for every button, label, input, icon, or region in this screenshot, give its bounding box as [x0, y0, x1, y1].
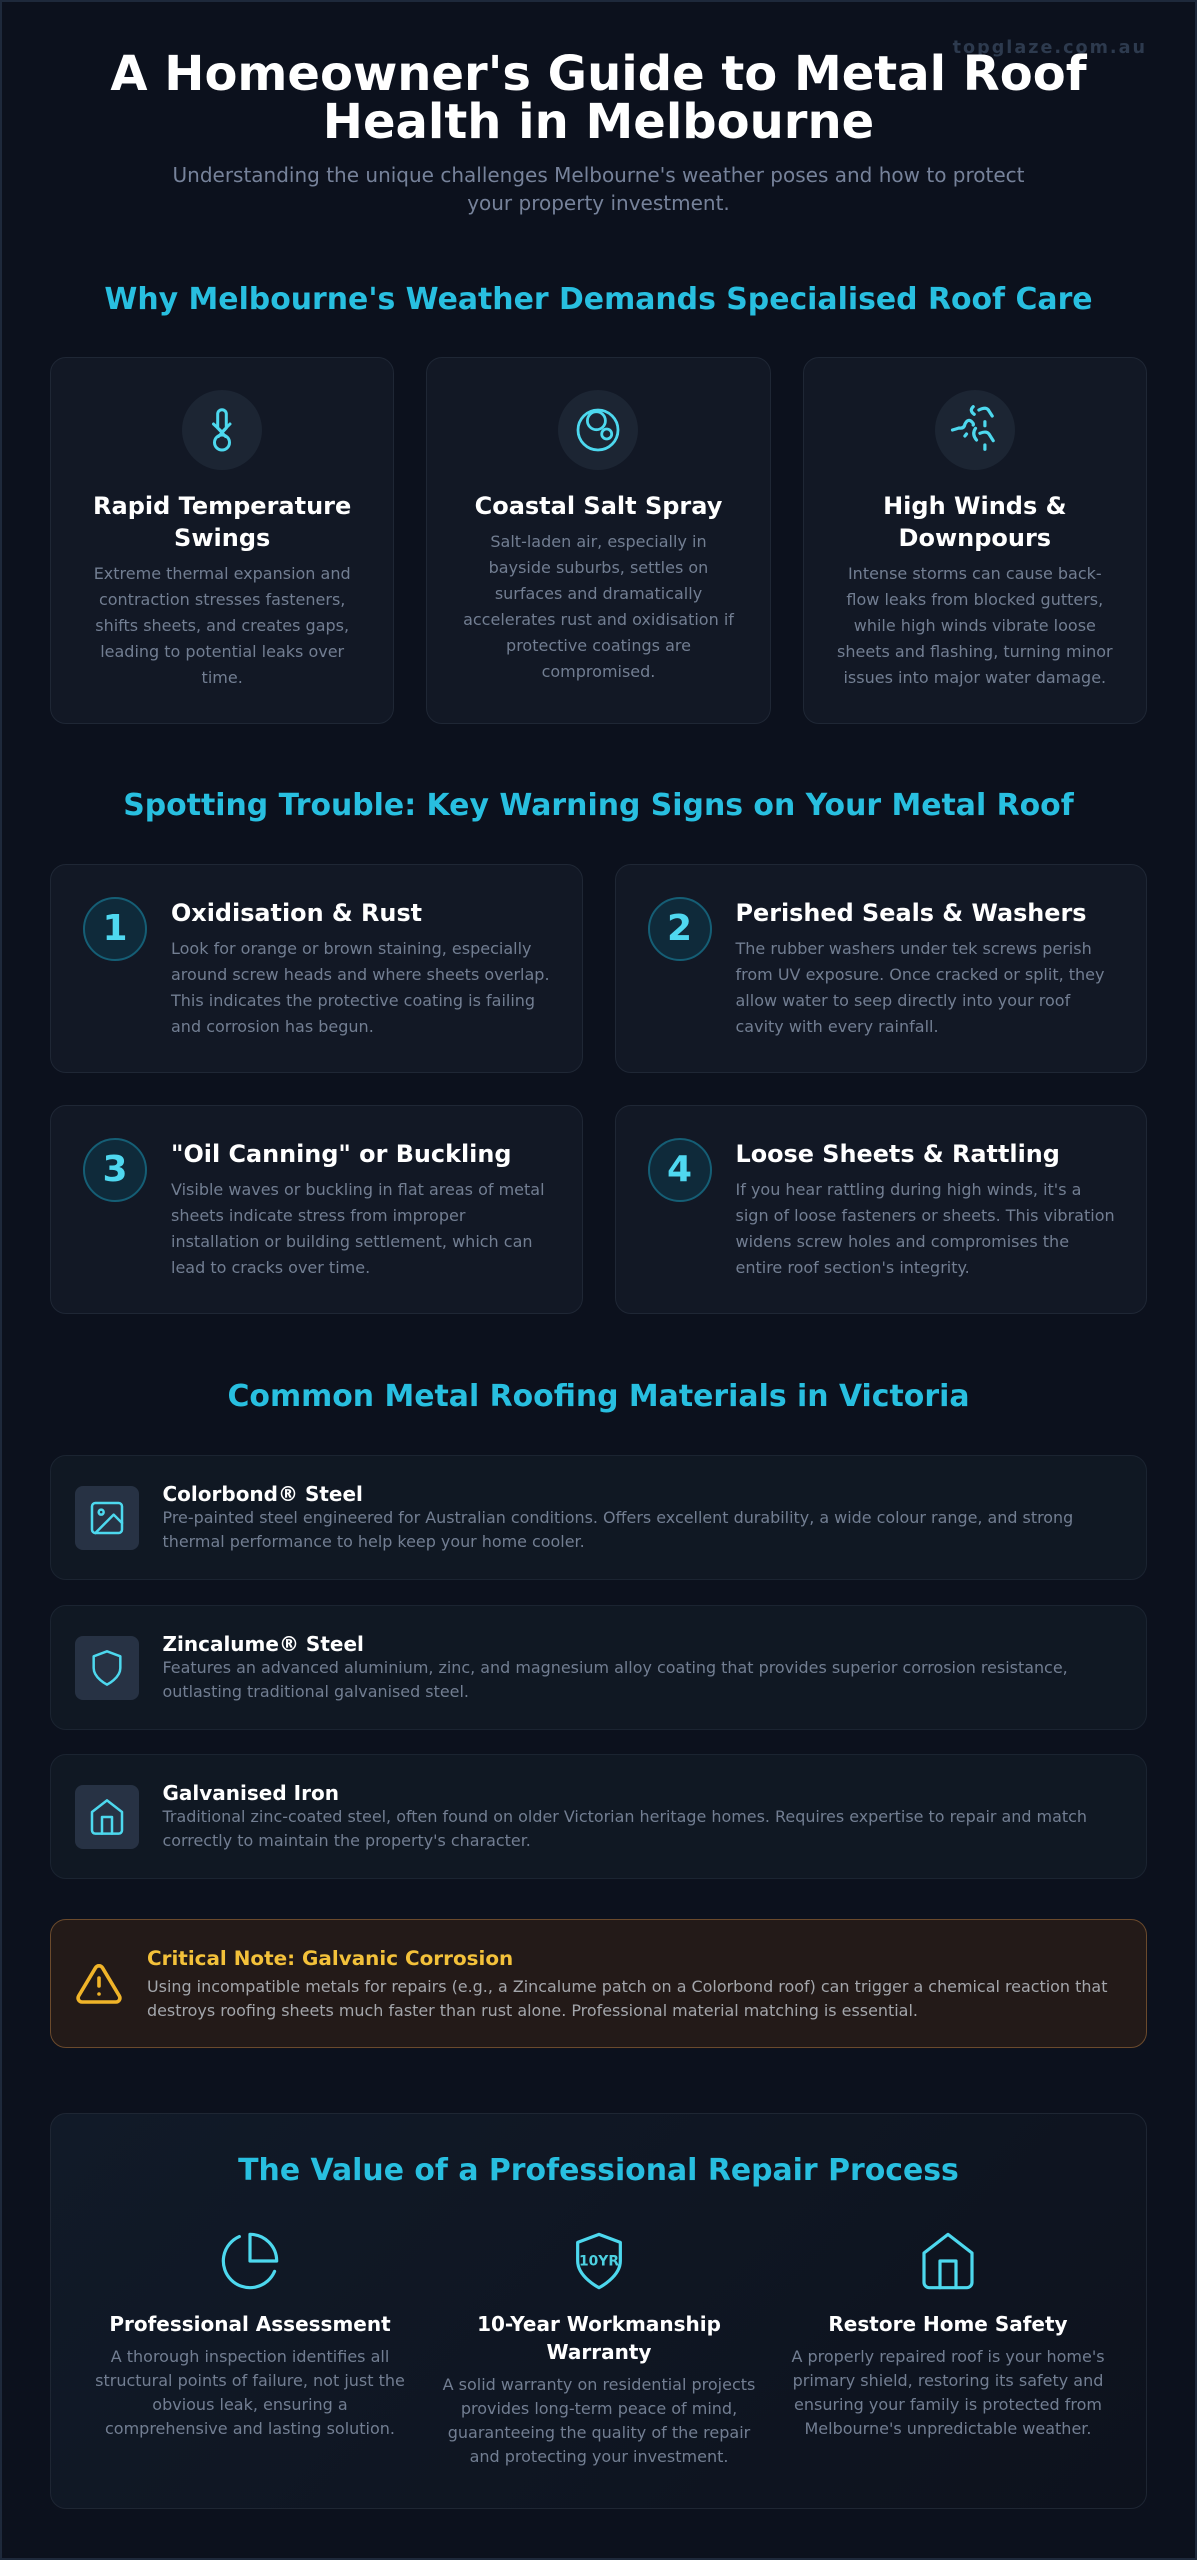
sign text: lead to cracks over time. [171, 1258, 370, 1276]
material text: Colorbond® Steel [162, 1482, 363, 1506]
column text: structural points of failure, not just the [95, 2371, 405, 2390]
card text: Intense storms can cause back- [848, 564, 1102, 583]
card text: Extreme thermal expansion and [94, 564, 351, 583]
material text: correctly to maintain the property's character. [162, 1831, 531, 1850]
panel: loose sheets [614, 1105, 1147, 1314]
icon: warranty shield: 10YR [579, 2253, 619, 2269]
material text: thermal performance to help keep your home cooler. [162, 1532, 585, 1551]
card text: bayside suburbs, settles on [489, 558, 708, 577]
card text: accelerates rust and oxidisation if [463, 610, 734, 629]
subtitle: Understanding the unique challenges Melbourne's weather poses and how to protect [172, 163, 1024, 187]
heading: value section: The Value of a Professional Repair Process [238, 2152, 959, 2188]
subtitle: your property investment. [467, 191, 730, 215]
number badge 2 [648, 897, 712, 961]
card title: High Winds & [883, 492, 1067, 520]
card text: sheets and flashing, turning minor [837, 642, 1113, 661]
heading: materials section: Common Metal Roofing Materials in Victoria [228, 1379, 970, 1414]
sign text: Perished Seals & Washers [736, 899, 1086, 927]
callout: galvanic corrosion [50, 1919, 1147, 2048]
title [110, 46, 1088, 150]
column text: A properly repaired roof is your home's [791, 2347, 1105, 2366]
column text: 10-Year Workmanship [477, 2312, 721, 2336]
card text: flow leaks from blocked gutters, [846, 590, 1103, 609]
card text: time. [202, 668, 243, 687]
card text [94, 564, 351, 687]
sign text: installation or building settlement, which can [171, 1232, 533, 1250]
column text: A solid warranty on residential projects [443, 2375, 755, 2394]
panel: oxidisation and rust [50, 864, 582, 1073]
card text: shifts sheets, and creates gaps, [95, 616, 349, 635]
panel: rapid temperature swings [50, 357, 394, 724]
column text: Restore Home Safety [828, 2312, 1068, 2336]
sign text: widens screw holes and compromises the [736, 1232, 1069, 1250]
sign text: If you hear rattling during high winds, it's a [736, 1180, 1081, 1198]
sign text: allow water to seep directly into your roof [736, 990, 1070, 1010]
callout text: Using incompatible metals for repairs (e.g., a Zincalume patch on a Colorbond roof) can trigger a chemical reaction that [147, 1977, 1107, 1996]
column text: Warranty [547, 2340, 651, 2364]
icon: thermometer [182, 390, 262, 470]
sign text: sheets indicate stress from improper [171, 1206, 465, 1224]
panel: perished seals [614, 864, 1147, 1073]
sign text: and corrosion has begun. [171, 1016, 374, 1036]
sign text: sign of loose fasteners or sheets. This vibration [736, 1206, 1115, 1224]
card text: while high winds vibrate loose [854, 616, 1096, 635]
sign text: entire roof section's integrity. [736, 1258, 970, 1276]
number badge 1 [83, 897, 147, 961]
material text: Traditional zinc-coated steel, often found on older Victorian heritage homes. Requires expertise to repair and match [162, 1807, 1087, 1826]
column text: Melbourne's unpredictable weather. [804, 2419, 1091, 2438]
sign text [171, 1140, 545, 1276]
icon: home [922, 2232, 974, 2290]
column text: primary shield, restoring its safety and [793, 2371, 1103, 2390]
icon: storm clouds [935, 390, 1015, 470]
icon: shield [75, 1636, 139, 1700]
column text: provides long-term peace of mind, [461, 2399, 737, 2418]
sign text: from UV exposure. Once cracked or split, they [736, 964, 1104, 984]
column text: obvious leak, ensuring a [152, 2395, 348, 2414]
panel: high winds and downpours [803, 357, 1147, 724]
column text [791, 2312, 1105, 2438]
icon: image tile [75, 1486, 139, 1550]
material text [162, 1482, 1073, 1551]
column text: A thorough inspection identifies all [111, 2347, 389, 2366]
number badge 4: 4 [667, 1149, 692, 1190]
icon: warning triangle [76, 1964, 122, 2004]
card text: contraction stresses fasteners, [99, 590, 345, 609]
card title [883, 492, 1067, 552]
sign text [170, 899, 550, 1036]
sign text: Oxidisation & Rust [171, 899, 422, 927]
panel: galvanised iron [50, 1754, 1147, 1879]
column: warranty [442, 2232, 755, 2466]
sign text: cavity with every rainfall. [736, 1016, 939, 1036]
column: home safety [791, 2232, 1105, 2438]
sign text: Visible waves or buckling in flat areas of metal [171, 1180, 545, 1198]
callout text: Critical Note: Galvanic Corrosion [147, 1946, 513, 1970]
title: Health in Melbourne [323, 94, 874, 150]
heading: warning signs section: Spotting Trouble: Key Warning Signs on Your Metal Roof [123, 788, 1074, 822]
card text: leading to potential leaks over [100, 642, 344, 661]
column text: Professional Assessment [109, 2312, 391, 2336]
column text: and protecting your investment. [470, 2447, 728, 2466]
card title: Rapid Temperature [93, 492, 351, 520]
column text [95, 2312, 405, 2438]
sign text [735, 899, 1104, 1036]
card text: Salt-laden air, especially in [490, 532, 707, 551]
card text [837, 564, 1113, 687]
sign text: around screw heads and where sheets overlap. [171, 964, 550, 984]
subtitle [172, 163, 1024, 215]
panel: coastal salt spray [426, 357, 771, 724]
card title [93, 492, 351, 552]
material text: Zincalume® Steel [162, 1632, 364, 1656]
heading: weather section: Why Melbourne's Weather Demands Specialised Roof Care [104, 282, 1093, 317]
column text: comprehensive and lasting solution. [105, 2419, 395, 2438]
sign text [736, 1140, 1115, 1276]
card title: Downpours [899, 524, 1051, 552]
material text: Pre-painted steel engineered for Australian conditions. Offers excellent durability, a wide colour range, and strong [162, 1508, 1073, 1527]
callout text [147, 1946, 1108, 2020]
number badge 2: 2 [667, 908, 692, 949]
icon: salt spray circles [558, 390, 638, 470]
callout text: destroys roofing sheets much faster than rust alone. Professional material matching is essential. [147, 2001, 918, 2020]
column: assessment [95, 2232, 405, 2438]
material text: outlasting traditional galvanised steel. [162, 1682, 469, 1700]
sign text: "Oil Canning" or Buckling [171, 1140, 511, 1168]
sign text: Look for orange or brown staining, especially [171, 938, 531, 958]
number badge 1: 1 [102, 908, 128, 949]
column text: guaranteeing the quality of the repair [448, 2423, 750, 2442]
sign text: The rubber washers under tek screws perish [736, 938, 1092, 958]
column text [442, 2312, 755, 2466]
material text: Galvanised Iron [162, 1781, 339, 1805]
card text: protective coatings are [506, 636, 691, 655]
icon: house [75, 1785, 139, 1849]
card text: issues into major water damage. [843, 668, 1106, 687]
number badge 3 [83, 1138, 147, 1202]
sign text: Loose Sheets & Rattling [736, 1140, 1060, 1168]
panel: oil canning [50, 1105, 582, 1314]
title: A Homeowner's Guide to Metal Roof [110, 46, 1087, 102]
panel: professional repair process [50, 2113, 1147, 2509]
number badge 3: 3 [102, 1149, 128, 1190]
number badge 4 [648, 1138, 712, 1202]
card text [463, 532, 734, 681]
material text: Features an advanced aluminium, zinc, and magnesium alloy coating that provides superior corrosion resistance, [162, 1658, 1068, 1676]
column text: ensuring your family is protected from [794, 2395, 1102, 2414]
material text [162, 1781, 1087, 1850]
sign text: This indicates the protective coating is failing [171, 990, 535, 1010]
material text [162, 1632, 1068, 1700]
card text: surfaces and dramatically [495, 584, 702, 603]
card text: compromised. [542, 662, 655, 681]
watermark: topglaze.com.au [953, 38, 1147, 58]
card title: Coastal Salt Spray [475, 492, 722, 520]
panel: zincalume steel [50, 1604, 1147, 1730]
panel: colorbond steel [50, 1455, 1147, 1580]
icon: pie chart [222, 2232, 278, 2290]
icon: warranty shield [576, 2232, 622, 2290]
card title: Swings [174, 524, 270, 552]
